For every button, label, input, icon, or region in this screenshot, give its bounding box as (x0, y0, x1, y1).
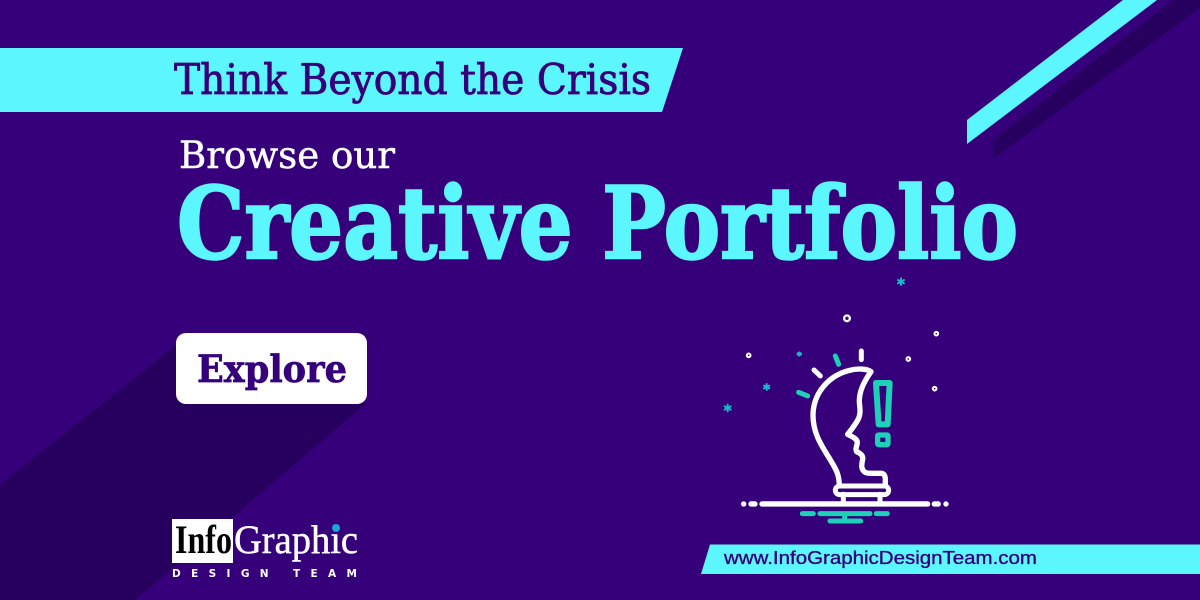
logo white box (172, 519, 233, 563)
subheading: Browse our (179, 134, 395, 177)
top banner with heading: Think Beyond the Crisis (174, 55, 651, 104)
white light rays (814, 351, 861, 376)
exclamation mark (876, 383, 890, 424)
logo word Graphic: Graphic (234, 517, 358, 562)
teal ground reflection (802, 514, 887, 521)
logo (172, 517, 358, 580)
exclamation dot (878, 435, 888, 445)
explore button (176, 333, 367, 404)
bulb outline with face profile (813, 369, 885, 485)
website strip: www.InfoGraphicDesignTeam.com (723, 548, 1037, 568)
main title: Creative Portfolio (177, 166, 1018, 282)
explore button: Explore (197, 347, 347, 391)
website strip (701, 544, 1200, 574)
small white rings (747, 315, 938, 390)
logo word Info: Info (175, 517, 232, 562)
decorative cyan stripe (967, 0, 1157, 144)
button long shadow (0, 345, 367, 600)
ground dots (741, 501, 949, 507)
top banner with heading (0, 48, 683, 112)
bulb base (835, 486, 889, 495)
teal light rays (799, 356, 839, 396)
bulb neck (843, 494, 880, 503)
decorative dark stripe (993, 0, 1200, 159)
icon: lightbulb with face and exclamation mark (725, 278, 949, 521)
teal sparkles (725, 278, 904, 411)
logo dot (332, 524, 340, 532)
logo tagline: DESIGN TEAM (172, 568, 357, 580)
ground line (751, 496, 938, 512)
